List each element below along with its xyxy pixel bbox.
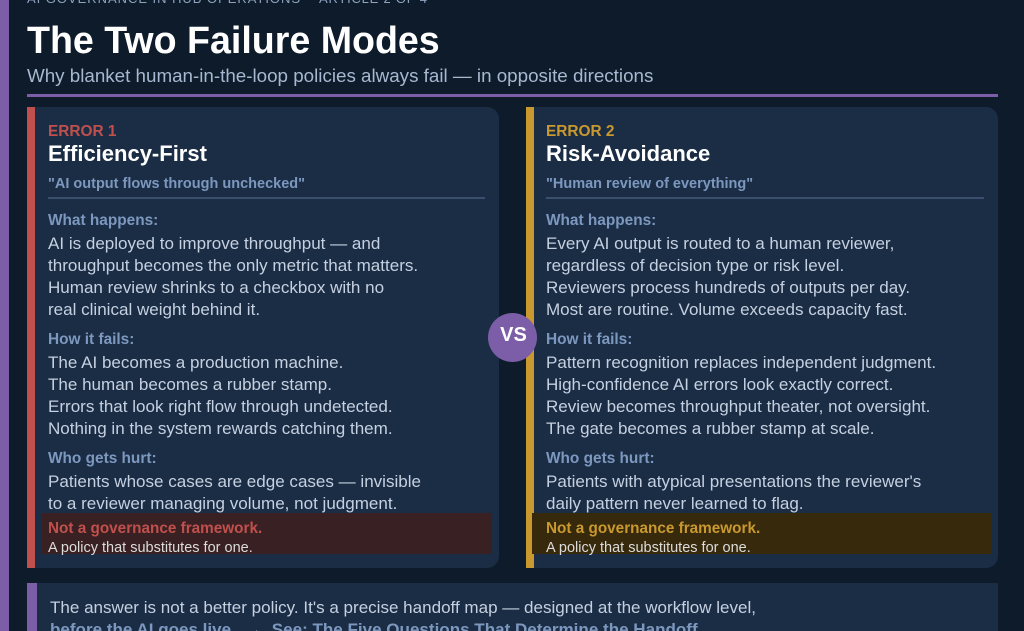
what happens: Every AI output is routed to a human reviewer, <box>546 234 894 253</box>
subtitle: Why blanket human-in-the-loop policies always fail — in opposite directions <box>27 65 653 86</box>
how it fails: The human becomes a rubber stamp. <box>48 375 332 394</box>
tagline divider <box>48 197 485 199</box>
what happens: Reviewers process hundreds of outputs per day. <box>546 278 910 297</box>
how it fails: The gate becomes a rubber stamp at scale. <box>546 419 875 438</box>
error 1 label: ERROR 1 <box>48 123 116 140</box>
error 2 label: ERROR 2 <box>546 123 614 140</box>
heading: Efficiency-First <box>48 140 207 166</box>
tagline: "AI output flows through unchecked" <box>48 176 305 192</box>
heading: Risk-Avoidance <box>546 140 710 166</box>
who gets hurt <box>48 450 421 513</box>
what happens: throughput becomes the only metric that matters. <box>48 256 418 275</box>
how it fails: Review becomes throughput theater, not oversight. <box>546 397 930 416</box>
verdict callout <box>41 512 492 554</box>
how it fails: How it fails: <box>546 331 632 348</box>
who gets hurt: Who gets hurt: <box>546 450 655 467</box>
how it fails: The AI becomes a production machine. <box>48 353 343 372</box>
who gets hurt: Who gets hurt: <box>48 450 157 467</box>
how it fails: Nothing in the system rewards catching them. <box>48 419 393 438</box>
who gets hurt: Patients with atypical presentations the reviewer's <box>546 472 921 491</box>
header rule <box>27 94 998 97</box>
who gets hurt: Patients whose cases are edge cases — invisible <box>48 472 421 491</box>
how it fails <box>48 331 393 438</box>
tagline divider <box>546 197 984 199</box>
how it fails: Pattern recognition replaces independent judgment. <box>546 353 936 372</box>
verdict callout: A policy that substitutes for one. <box>48 540 253 556</box>
what happens: real clinical weight behind it. <box>48 300 260 319</box>
what happens: Most are routine. Volume exceeds capacity fast. <box>546 300 908 319</box>
what happens: What happens: <box>48 212 158 229</box>
what happens <box>546 212 910 319</box>
title: The Two Failure Modes <box>27 19 440 61</box>
verdict callout: Not a governance framework. <box>546 520 760 537</box>
who gets hurt: to a reviewer managing volume, not judgment. <box>48 494 397 513</box>
panel: error 1 efficiency-first <box>27 107 499 568</box>
what happens: Human review shrinks to a checkbox with no <box>48 278 384 297</box>
how it fails: Errors that look right flow through undetected. <box>48 397 393 416</box>
who gets hurt <box>546 450 921 513</box>
how it fails: High-confidence AI errors look exactly correct. <box>546 375 893 394</box>
panel: error 2 risk-avoidance <box>526 107 998 568</box>
what happens: regardless of decision type or risk level. <box>546 256 844 275</box>
vs badge <box>488 313 537 362</box>
tagline: "Human review of everything" <box>546 176 753 192</box>
how it fails: How it fails: <box>48 331 134 348</box>
left accent bar <box>0 0 9 631</box>
who gets hurt: daily pattern never learned to flag. <box>546 494 804 513</box>
what happens: AI is deployed to improve throughput — and <box>48 234 380 253</box>
what happens <box>48 212 418 319</box>
verdict callout: A policy that substitutes for one. <box>546 540 751 556</box>
eyebrow <box>27 0 428 6</box>
vs badge: VS <box>500 324 527 346</box>
panel: conclusion <box>27 583 998 631</box>
what happens: What happens: <box>546 212 656 229</box>
how it fails <box>546 331 936 438</box>
verdict callout <box>532 512 991 554</box>
verdict callout: Not a governance framework. <box>48 520 262 537</box>
conclusion text: The answer is not a better policy. It's a precise handoff map — designed at the workflow level, <box>50 598 756 617</box>
